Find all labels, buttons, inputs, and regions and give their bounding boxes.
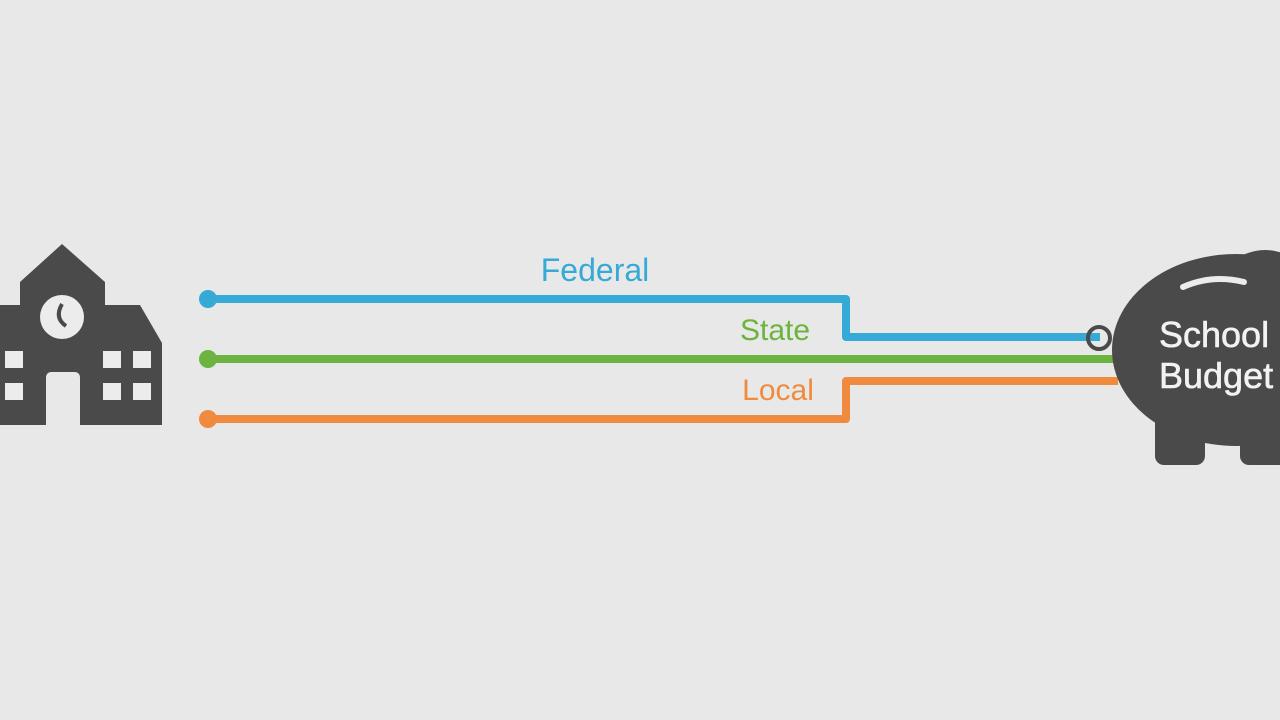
icon: piggy bank: Budget [1159,355,1273,396]
line: state [199,350,1118,368]
text: school budget: School [1159,314,1269,355]
line: local [199,381,1118,428]
line: federal [199,290,1100,337]
icon: school building [0,244,162,430]
label: federal: Federal [541,252,649,288]
icon: piggy bank [1088,250,1280,465]
label: local: Local [742,374,814,407]
label: state: State [740,314,810,347]
